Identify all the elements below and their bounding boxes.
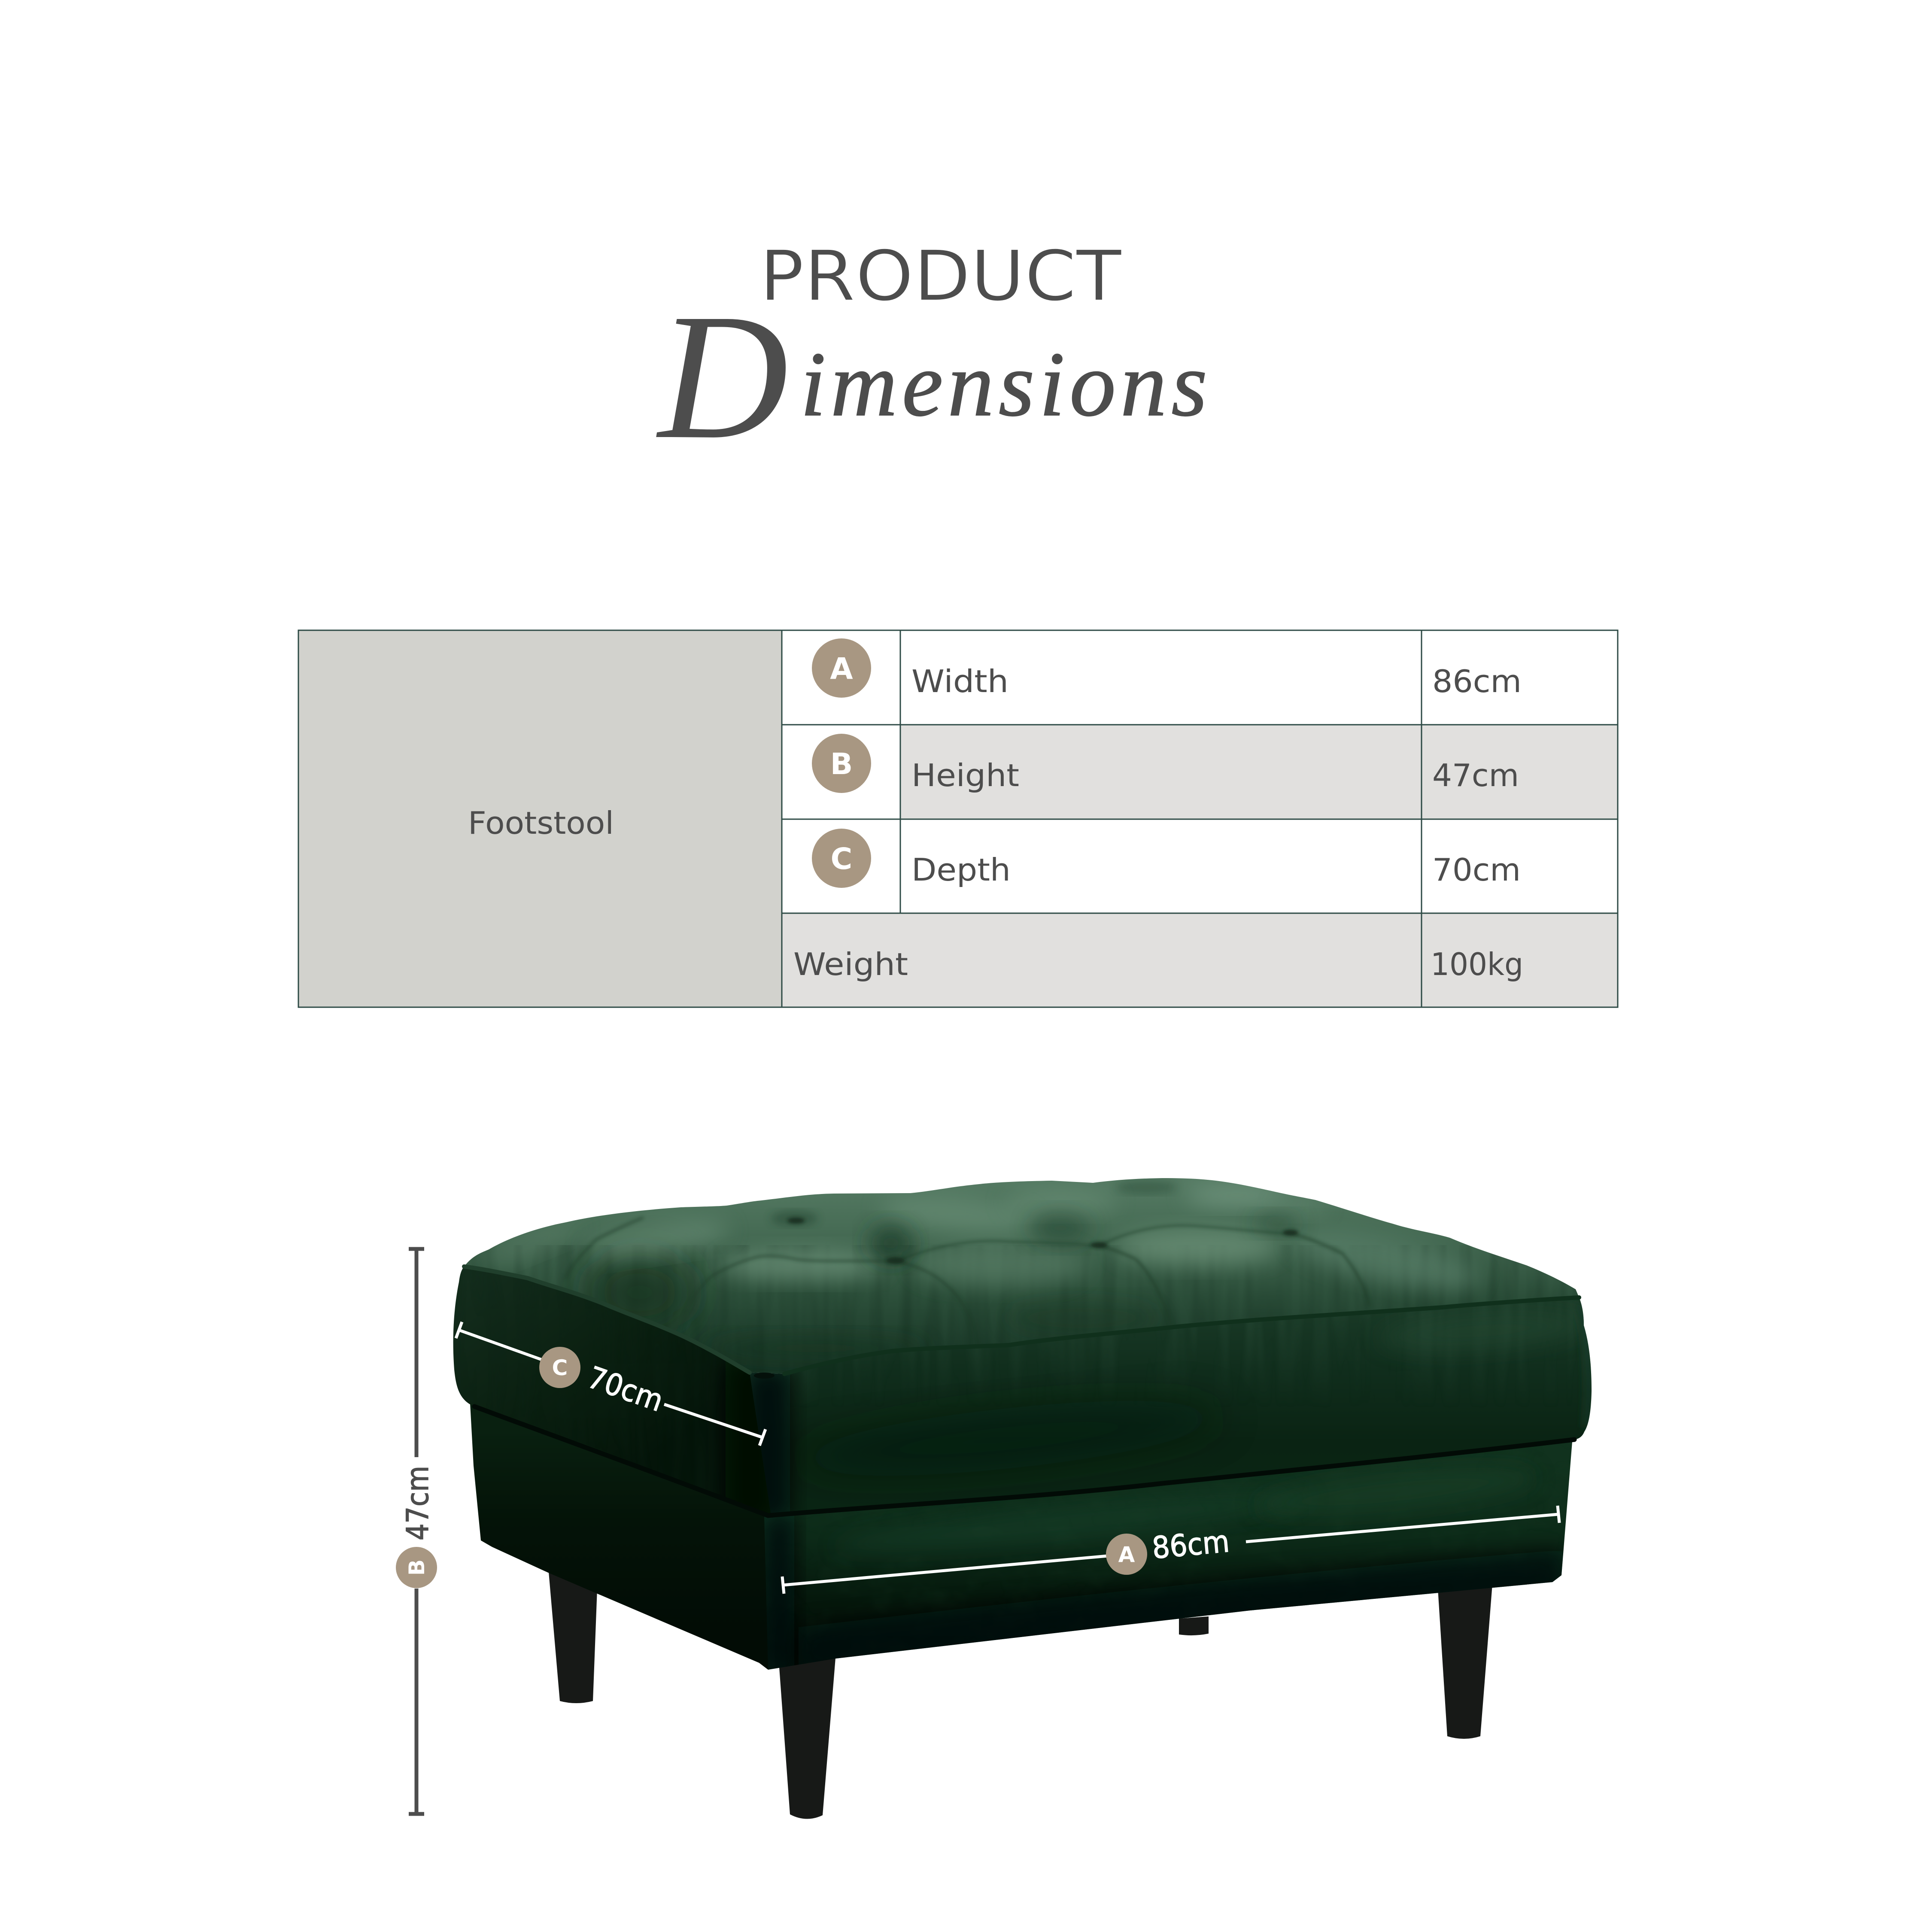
tuft valleys [771,1180,1301,1261]
badge: C [812,829,871,888]
piping seams [464,1267,1579,1516]
width measure A [782,1506,1559,1594]
row shading: height [900,725,1618,819]
height measure B [396,1249,437,1814]
badge: A [812,638,871,698]
pillow highlights [480,1212,585,1273]
value: 47cm: 47cm [1432,757,1519,793]
label 70cm: 70cm [583,1360,668,1419]
label: Depth: Depth [911,852,1011,888]
value: 86cm: 86cm [1432,663,1522,699]
left piping [464,1267,750,1373]
depth measure C [456,1322,766,1446]
label: Footstool: Footstool [468,805,614,841]
tuft buttons [787,1218,1298,1264]
corner shadow [754,1373,775,1379]
badge: C: C [831,842,852,876]
right leg [1438,1584,1492,1739]
row shading: weight [782,913,1618,1007]
badge: A: A [830,652,853,686]
footstool illustration [447,1172,1597,1819]
base: front face [756,1434,1580,1674]
dimensions table [298,630,1618,1007]
value: 100kg: 100kg [1431,946,1523,982]
badge: B [812,734,871,793]
value: 70cm: 70cm [1432,852,1521,888]
cushion: left face [453,1268,773,1518]
panel: footstool cell [298,630,782,1007]
tuft creases [566,1218,1369,1344]
label: Height: Height [911,757,1019,793]
badge A: A [1118,1542,1135,1567]
lower cushion seam [474,1406,1574,1516]
heading: PRODUCT: PRODUCT [759,236,1122,317]
label 47cm: 47cm [400,1466,435,1540]
dark pillow sides [588,1254,691,1331]
heading: Dimensions script: D [655,276,788,476]
front left leg [779,1653,836,1819]
title [655,236,1212,476]
badge: B: B [830,747,853,781]
front piping [784,1297,1579,1374]
badge B [396,1547,437,1588]
badge A [1106,1534,1147,1575]
back right small leg [1179,1616,1209,1635]
base: left face [470,1404,781,1670]
back left leg [548,1567,597,1703]
badge B: B [404,1559,429,1576]
label: Width: Width [911,663,1009,699]
badge C: C [552,1355,568,1380]
heading: Dimensions script: imensions [800,333,1212,435]
cushion: top surface [451,1172,1593,1382]
label 86cm: 86cm [1151,1524,1231,1566]
cushion: front face [750,1299,1592,1513]
label: Weight: Weight [793,946,908,982]
badge C [539,1347,580,1388]
